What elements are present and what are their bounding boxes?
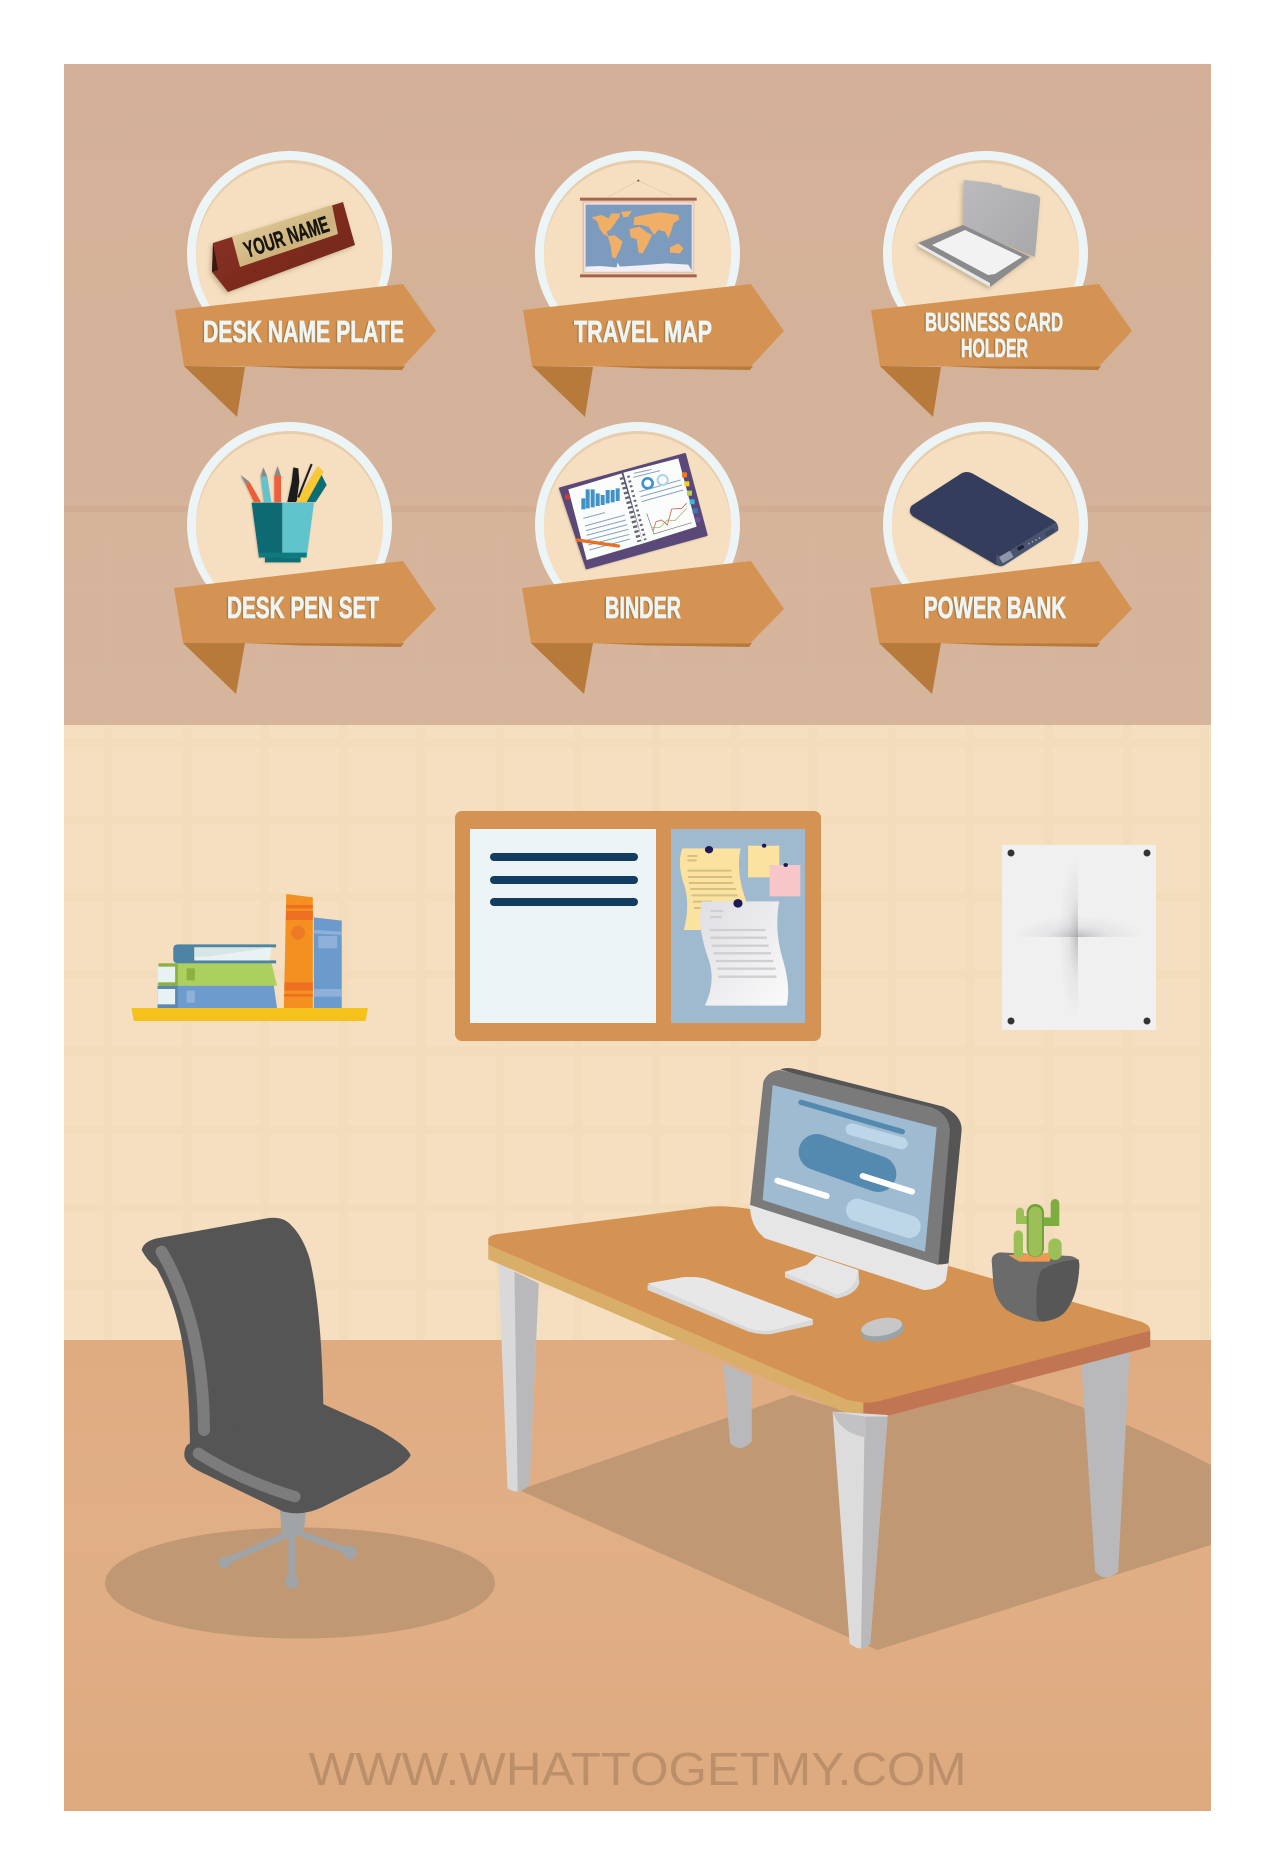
keyboard	[648, 1277, 813, 1334]
icon: open binder	[560, 454, 707, 568]
notice board	[455, 811, 821, 1041]
office chair	[142, 1218, 411, 1589]
ribbon	[523, 284, 784, 370]
ribbon tail	[531, 643, 593, 694]
whiteboard	[470, 829, 656, 1023]
monitor bezel	[750, 1070, 950, 1265]
icon: pen cup	[241, 464, 327, 562]
badge: business card holder	[871, 151, 1132, 417]
monitor chin	[750, 1205, 948, 1290]
chair base	[218, 1510, 357, 1589]
screen	[763, 1085, 937, 1252]
icon: wooden name plate: YOUR NAME	[241, 211, 332, 263]
ribbon	[175, 284, 436, 370]
badge: travel map	[523, 151, 784, 417]
orange upright book	[284, 894, 313, 1008]
seat highlight	[198, 1453, 295, 1497]
back leg	[723, 1363, 752, 1448]
badge: binder	[522, 422, 784, 694]
ribbon tail	[879, 643, 941, 694]
circle	[883, 422, 1088, 627]
text lines	[490, 853, 638, 906]
monitor stand	[785, 1256, 859, 1298]
screen content	[777, 1102, 912, 1227]
chair seat	[184, 1403, 411, 1513]
website footer text: WWW.WHATTOGETMY.COM	[308, 1743, 966, 1795]
shelf	[131, 1008, 368, 1021]
ribbon tail	[532, 366, 593, 417]
icon: wooden name plate	[212, 202, 355, 292]
blue upright book	[314, 917, 342, 1008]
ribbon tail	[183, 643, 245, 694]
ribbon tail	[880, 366, 941, 417]
plant pot	[992, 1252, 1079, 1322]
circle	[535, 422, 740, 627]
label: TRAVEL MAP	[574, 314, 712, 349]
back highlight	[162, 1252, 204, 1430]
icon: power bank	[912, 474, 1058, 566]
circle	[535, 151, 740, 356]
badge: power bank	[870, 422, 1132, 694]
panel: product shelf background	[64, 64, 1211, 725]
stacked books	[158, 944, 277, 1008]
circle	[883, 151, 1088, 356]
desk top	[488, 1206, 1150, 1404]
pin board	[671, 829, 805, 1023]
ribbon	[174, 561, 436, 647]
label: BUSINESS CARD	[925, 307, 1063, 337]
books on shelf	[131, 894, 368, 1021]
badge: desk pen set	[174, 422, 436, 694]
cactus	[1018, 1203, 1055, 1257]
label: BINDER	[605, 590, 681, 625]
mouse	[859, 1315, 906, 1345]
left leg	[498, 1263, 539, 1492]
ribbon	[871, 284, 1132, 370]
chair shadow	[105, 1528, 495, 1638]
icon: card holder	[918, 180, 1040, 287]
right leg	[1081, 1352, 1130, 1577]
circle	[187, 151, 392, 356]
wall poster	[1002, 845, 1156, 1030]
ribbon	[522, 561, 784, 647]
icon: world map	[580, 180, 697, 277]
ribbon	[870, 561, 1132, 647]
ribbon tail	[184, 366, 245, 417]
label: DESK NAME PLATE	[203, 314, 404, 349]
label line 2: HOLDER	[961, 333, 1028, 363]
chair back	[142, 1218, 323, 1453]
panel: wall with tile grid	[64, 725, 1211, 1340]
panel: floor	[64, 1340, 1211, 1811]
computer monitor	[750, 1068, 1079, 1345]
label: POWER BANK	[924, 590, 1066, 625]
badge: desk name plate	[175, 151, 436, 417]
desk shadow	[519, 1383, 1211, 1650]
pinned notes	[680, 844, 800, 1006]
front leg	[833, 1412, 888, 1648]
board frame	[455, 811, 821, 1041]
label: DESK PEN SET	[227, 590, 379, 625]
monitor back	[780, 1068, 962, 1265]
desk left edge	[488, 1245, 863, 1417]
desk	[488, 1206, 1150, 1648]
circle	[187, 422, 392, 627]
desk right edge	[863, 1331, 1150, 1418]
